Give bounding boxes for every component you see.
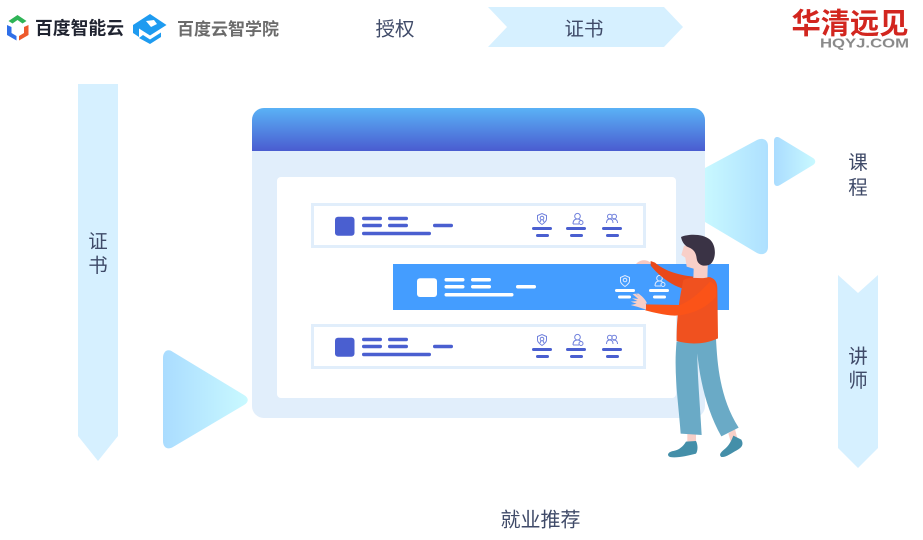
icon: graduation cap — [133, 14, 166, 44]
logo: Baidu Cloud Academy — [133, 14, 279, 44]
shoes — [668, 441, 697, 457]
front arm — [645, 282, 716, 316]
ankles — [687, 429, 737, 443]
label: course — [848, 152, 868, 199]
logo text: 百度智能云 — [35, 18, 124, 38]
ribbon: certificate — [78, 84, 118, 461]
arrow: small right triangle — [774, 137, 815, 186]
label: course: 课 — [848, 152, 868, 174]
list row 2 highlighted — [393, 260, 729, 310]
window panel — [252, 108, 705, 418]
window content — [277, 177, 676, 398]
icon: hexagon logo — [7, 15, 28, 40]
label: course: 程 — [848, 177, 868, 199]
ribbon: instructor — [838, 275, 878, 468]
trousers — [676, 338, 739, 436]
nav item: certificate chevron: 证书 — [564, 18, 604, 40]
arrow: large right triangle — [163, 350, 248, 448]
nav item: authorization: 授权 — [375, 18, 415, 40]
logo: Baidu AI Cloud — [7, 15, 124, 40]
nav item: certificate chevron — [488, 7, 683, 47]
neck and head — [693, 258, 708, 280]
arrow: large left triangle — [705, 139, 768, 254]
hair — [681, 235, 715, 266]
list row 3 — [312, 326, 644, 368]
window header — [252, 108, 705, 151]
list row 1 — [312, 204, 644, 246]
ribbon: instructor: 师 — [848, 370, 868, 392]
hand — [631, 294, 647, 310]
ribbon: instructor: 讲 — [848, 346, 868, 368]
logo: HQYJ: 华清远见 — [792, 8, 908, 40]
logo: HQYJ: HQYJ.COM — [820, 36, 909, 50]
caption: job recommendation: 就业推荐 — [500, 508, 580, 532]
logo text: 百度云智学院 — [177, 19, 279, 39]
ribbon: certificate: 证 — [88, 231, 108, 253]
ribbon: certificate: 书 — [88, 255, 108, 277]
back arm — [651, 261, 693, 290]
sweater — [677, 277, 718, 343]
illustration: man touching the panel — [631, 235, 743, 457]
